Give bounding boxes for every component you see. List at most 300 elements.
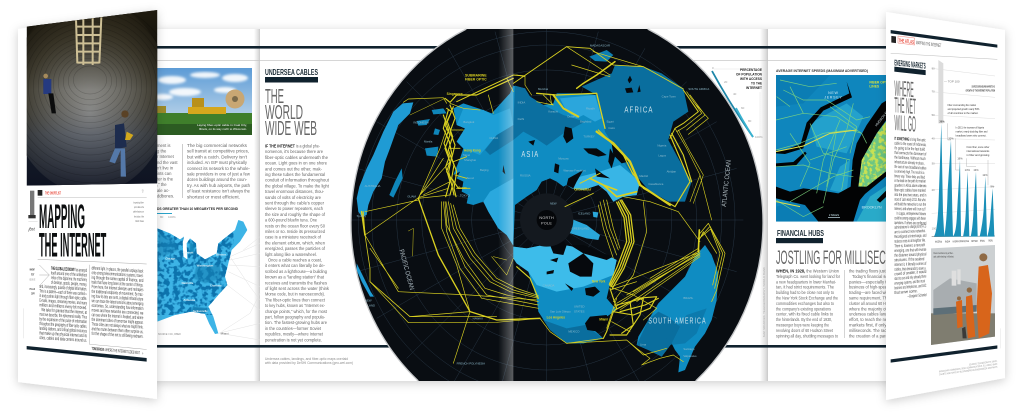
text block: emerging markets article: Reconfigured at interchange, and [894, 233, 927, 239]
text block: undersea cables article: known as a "landing station" that [265, 275, 325, 280]
chart: projected internet growth by market: 20% [948, 136, 954, 140]
legend: percentage of population with internet access: 60 [741, 106, 745, 110]
panel: left cover page: THE INTERNET [39, 226, 106, 264]
region: Andes shading [637, 312, 680, 357]
text block: undersea cables article: tion. The fastest-growing hubs are [265, 320, 328, 325]
text block: intro article second column: ing through the same capital of finance, and [92, 275, 144, 283]
panel: right page, emerging markets: Internet, and where will it run out? [894, 206, 926, 212]
place labels: San Luis Obispo [550, 310, 571, 314]
place labels: Egypt [607, 120, 614, 124]
chart annotations: and projected growth nearly 50% [948, 107, 980, 111]
text block: emerging markets article: into the past two years, and in [894, 192, 927, 198]
place labels: Nigeria [657, 144, 667, 148]
region: far east Russia [483, 178, 513, 246]
panel: right page, emerging markets: WHERE [894, 76, 914, 102]
cables: South Atlantic fan [612, 248, 700, 310]
chart: projected internet growth by market: 13% [965, 168, 971, 172]
text block: emerging markets article: In Lagos, entrepreneur Moses [897, 211, 926, 216]
chart annotations: international networks [967, 149, 990, 153]
land: Africa [582, 65, 692, 202]
text block: emerging markets article: are to connect new networks. [894, 228, 926, 234]
chart axis labels: KAZAKHSTAN [953, 239, 963, 243]
region: Canada [513, 246, 617, 292]
section tag: THE SHORTLIST [45, 191, 61, 197]
chart: projected internet growth by market: 70 [932, 90, 935, 94]
cables: Red Sea and Mediterranean [597, 132, 640, 185]
callout: submarine fiber optic: Los Angeles [547, 316, 565, 320]
place labels: INDIA [518, 100, 525, 104]
map: United States internet speeds: Boston [216, 253, 226, 257]
map: United States internet speeds: Miami [221, 331, 229, 335]
text block: undersea cables article: and comes out the other, mak- [265, 166, 323, 171]
text block: undersea cables article: it enters what can literally be de- [265, 263, 326, 268]
north pole marker [520, 193, 573, 247]
text block: fragment of first column: g the [157, 149, 167, 154]
running head: THE ATLAS [899, 38, 914, 46]
callout: submarine fiber optic: Singapore [447, 92, 463, 96]
ocean labels [397, 160, 733, 291]
text block: commercial networks column: included. An ISP must physically [187, 160, 248, 165]
chart: projected internet growth by market [932, 60, 995, 244]
sidebar labels: WHEN? [30, 268, 35, 272]
text block: financial hubs article: undersea cables land, with great [849, 312, 908, 317]
text block: financial hubs article: the company's existing operations [776, 306, 831, 311]
place labels: Baghdad [580, 119, 592, 123]
north pole marker: NORTH [539, 216, 554, 220]
photo caption: cable factory on [133, 210, 144, 214]
place labels: FRENCH POLYNESIA [457, 361, 485, 365]
title: the world wide web: WORLD [265, 102, 303, 124]
chart annotations: — TOP 100 [944, 79, 960, 83]
panel: left cover page: Pacific Ocean [135, 219, 144, 223]
chart axis labels: NIGERIA [935, 240, 942, 244]
chart: projected internet growth by market: 40 [932, 136, 935, 140]
text block: fragment of first column: n't live in [157, 165, 174, 170]
text block: financial hubs article: markets first, if only by a few [849, 322, 905, 328]
patches of lighter blue [776, 75, 863, 222]
panel: left cover page: throughout the geography of fiber-optic cables, [39, 321, 87, 329]
chart heading: US speeds [157, 207, 238, 219]
text block: undersea cables article: sleeve to power repeaters, each [265, 206, 324, 211]
text block: intro article second column: and the routes between them often surprise us, [92, 326, 143, 334]
map contents clipped to disc [352, 29, 744, 381]
photo: cable-laying tractor in a field: Laying fiber-optic cable in Coal City, [197, 123, 247, 127]
map: United States internet speeds: Detroit [184, 250, 193, 254]
chart: projected internet growth by market: 100 [932, 226, 937, 230]
text block: fragment of first column: ale ac- [157, 188, 170, 193]
region: China [457, 108, 513, 155]
text block: undersea cables article: ing these tubes the fundamental [265, 172, 325, 177]
worker left [43, 74, 56, 113]
sidebar labels: PULLS [30, 287, 35, 291]
text block: intro article [39, 265, 87, 343]
land: Greenland and Iceland [570, 212, 600, 240]
text block: intro article second column: From here, the Internet diverges and reshapes [92, 284, 144, 292]
panel: central fold-out spread [150, 29, 895, 381]
place labels: STATES [574, 309, 585, 313]
footnote: CHARTS AND MAPS BY BLOOMBERG BUSINESSWEEK GRAPHICS [939, 366, 998, 376]
place labels: Warsaw Frankfurt [563, 169, 586, 173]
text block: emerging markets article: the distance toward physical [894, 251, 926, 258]
text block: intro article: million and millions every bit moved. [39, 302, 87, 310]
panel: right page, emerging markets: MAPPING THE INTERNET [916, 40, 941, 49]
map: fiber-optic lines in New York and New Jersey [776, 75, 894, 222]
cables: East Asia cluster [443, 105, 470, 197]
section tag: ⇧ [141, 189, 145, 194]
callout: submarine fiber optic [447, 73, 608, 321]
text block: undersea cables article: travel enormous distances, thou- [265, 189, 325, 194]
neighbourhood labels: NEW [828, 91, 839, 95]
text block: financial hubs article: effort, to reach the new wave of [849, 317, 906, 322]
heading: average internet speeds: AVERAGE INTERNET SPEEDS (MAXIMUM ADVERTISED) [776, 69, 869, 73]
place labels: Cairo [608, 126, 616, 130]
place labels: MADAGASCAR [590, 44, 610, 48]
photo: crew in orange landing a cable: Crew members lay a fiber- [933, 251, 953, 255]
text block: undersea cables article: of light sent across the water (think [265, 286, 330, 291]
neighbourhood labels: BROOKLYN [862, 206, 882, 210]
text block: emerging markets article: binary way. These links are lifted [894, 173, 925, 180]
text block: financial hubs article: milliseconds. The race has led to [849, 328, 908, 333]
place labels: Casablanca [648, 182, 664, 186]
chart axis labels: INDIA [945, 239, 950, 243]
map: United States internet speeds: Atlanta [183, 298, 195, 302]
rivers [776, 82, 890, 222]
text block: emerging markets article: cables, that demands to save a [894, 265, 926, 272]
place labels: Sydney [357, 214, 367, 218]
text block: undersea cables article: nomenon, it's because there are [265, 149, 324, 154]
cables: Caribbean cluster [603, 288, 658, 338]
map: fiber-optic lines in New York and New Jersey: FIBER OPTIC [869, 80, 891, 84]
text block: emerging markets article: is extremely high. The result is a [894, 169, 925, 175]
neighbourhood labels: JERSEY [824, 96, 842, 100]
legend: percentage of population with internet access: 0 [712, 66, 714, 70]
chart annotations: broadband users who connect. [956, 134, 986, 138]
text block: financial hubs article [776, 268, 911, 338]
chart: projected internet growth by market: 20 [932, 188, 935, 192]
place labels: ZEALAND [362, 304, 375, 308]
text block: emerging markets article: will build the networks to run the [894, 201, 926, 207]
text block: undersea cables article: case is a miniature racetrack of [265, 235, 322, 240]
text block: intro article: by the expansion of the pulse of information [39, 316, 87, 324]
text block: undersea cables article: energized, passes the particles of [265, 246, 326, 251]
callout: submarine fiber optic: Hong Kong [464, 148, 481, 152]
panel: left cover page: optic cable at the [134, 205, 144, 209]
panel: right page, emerging markets: THE NET [894, 92, 916, 119]
place labels: GUAM [407, 194, 416, 198]
submarine cables [362, 47, 725, 365]
text block: emerging markets article: cable to the coast of Indonesia, [894, 141, 926, 147]
text block: intro article: landing stations, and critical global resources [39, 326, 87, 334]
text block: undersea cables article: ocean. Light goes in on one shore [265, 161, 328, 166]
text block: emerging markets article: that connects the dominant of [894, 150, 927, 157]
panel: right page, emerging markets [886, 12, 1005, 400]
legend: percentage of population with internet access: TO THE [751, 82, 763, 86]
place labels: Shanghai [464, 158, 476, 162]
place labels: Beijing [480, 168, 489, 172]
text block: fragment of first column: ints can [157, 171, 172, 176]
cables: Asia to Indian Ocean [403, 98, 447, 103]
text block: emerging markets article: most of Latin early 2013. But who [894, 197, 926, 202]
text block: commercial networks column: of least resistance isn't always the [187, 189, 251, 194]
ocean labels: ATLANTIC OCEAN [721, 160, 733, 207]
photo: crew in orange landing a cable: optic cable landing in Mumbai. [933, 254, 954, 258]
text block: intro article second column: trails that have long been at the center of things. [92, 280, 143, 288]
text block: financial hubs article: the trading floors just blocks away. [849, 268, 909, 274]
text block: financial hubs article: building had to be close not only to [776, 290, 835, 295]
legend: percentage of population with internet access: 80 [748, 119, 752, 123]
text block: undersea cables article: change points," which, for the most [265, 309, 328, 314]
land: Australia [357, 102, 413, 217]
callout: submarine fiber optic: New York [592, 279, 605, 283]
text block: intro article second column: the traditional endpoints of movement. By trac- [92, 289, 144, 297]
text block: undersea cables article: fiber-optic cables underneath the [265, 155, 329, 160]
text block: fragment of first column: nd the vast [157, 160, 178, 165]
callout: submarine fiber optic: FIBER OPTIC [465, 78, 487, 82]
chart axis labels: PERU [988, 239, 993, 243]
text block: undersea cables article: IF THE INTERNET is a global phe- [265, 144, 321, 148]
text block: undersea cables article: republics, mostly—where Internet [265, 332, 324, 337]
map: United States internet speeds: SOURCE: FCC, FIBER [158, 332, 181, 336]
land: North America [513, 246, 617, 344]
text block: undersea cables article: the global village. To make the light [265, 183, 330, 188]
text block: intro article second column: economies. So, understanding how information [92, 303, 144, 311]
fold shadow across map [498, 29, 513, 381]
text block: undersea cables article: part, follow geography and popula- [265, 314, 326, 320]
panel: left cover page: relics of the digital era: the machinery [51, 275, 87, 282]
text block: intro article: THE GLOBAL ECONOMY has arranged [51, 266, 87, 273]
footer teaser [90, 344, 147, 356]
text block: intro article second column: can see where the Internet is headed, and where [92, 312, 144, 320]
title: mapping the internet [39, 198, 106, 264]
place labels: CHINA [489, 136, 498, 140]
text block: intro article: and, increasingly, quanta of digital information. [39, 284, 87, 292]
text block: commercial networks column: but with a catch. Delivery isn't [187, 154, 248, 159]
text block: financial hubs article: WHEN, IN 1928, the Western Union [776, 268, 840, 274]
text block: commercial networks column: dozen buildings around the coun- [187, 177, 248, 182]
text block: emerging markets article: that serve some. [894, 288, 918, 295]
photo: cable-laying tractor in a field [153, 68, 252, 135]
place labels: Karachi [548, 109, 558, 113]
sidebar labels: COPY [31, 292, 35, 296]
text block: financial hubs article: cluster all around 60 Hudson, which is [849, 301, 911, 306]
title: the world wide web: WIDE WEB [265, 118, 317, 140]
chart heading: US speeds: 100% [168, 215, 176, 219]
place labels: NEW [365, 299, 372, 303]
title: the world wide web [265, 86, 317, 140]
region: Europe [572, 165, 640, 202]
place labels: TOKYO [460, 194, 471, 198]
thick rule [27, 346, 147, 362]
text block: financial hubs article: center, with its fixed cable links to [776, 312, 834, 317]
text block: emerging markets article [894, 136, 927, 300]
text block: fragment of first column: r Internet [157, 154, 175, 159]
text block: undersea cables article: conduit of information throughout [265, 178, 330, 183]
text block: emerging markets article: internet it, it literally comes of [894, 261, 927, 267]
place labels: Manila [424, 140, 433, 144]
continent labels [521, 105, 707, 325]
text block: fragment of first column [157, 143, 178, 198]
heading: financial hubs [776, 228, 824, 243]
big numeral: jbst [28, 226, 35, 231]
text block: intro article: that make up the physical internet and its [39, 330, 87, 338]
text block: undersea cables article [265, 144, 330, 342]
text block: emerging markets article: infrastructure already in place, [894, 159, 924, 166]
text block: undersea cables article: scribed as a lighthouse—a building [265, 269, 328, 274]
legend: percentage of population with internet access: 40 [733, 92, 737, 96]
text block: undersea cables article: Morse code, but in nanoseconds). [265, 292, 325, 297]
text block: intro article second column: different light. In places, the parallel unplugs back [92, 266, 144, 274]
text block: intro article: This is a pattern—each of them was carried— [39, 288, 87, 296]
section tag [38, 189, 147, 197]
text block: financial hubs article: revolving doors of 60 Hudson Street [776, 328, 834, 333]
legend: percentage of population with internet access: INTERNET [746, 86, 763, 90]
chart annotations: From fiber, some other [967, 145, 989, 149]
map: United States internet speeds: Chicago [165, 256, 175, 260]
world map: submarine fiber-optic cables centred on the North Pole [350, 28, 764, 382]
cables: Pacific coast of the Americas [517, 267, 538, 298]
place labels: TURKEY [583, 135, 595, 139]
panel: right page, emerging markets: EMERGING MARKETS [894, 57, 926, 71]
caption: map credit: with data provided by DeSHI Communications (geo-wel.com) [265, 361, 353, 365]
place labels: Cape Town [662, 95, 676, 99]
place labels: RUSSIA [520, 173, 531, 177]
bottom rule [891, 345, 997, 363]
text block: financial hubs article: panies—especially those in the [849, 279, 908, 284]
place labels: HAWAII [473, 317, 483, 321]
Brooklyn [857, 183, 890, 222]
map: United States internet speeds: Nashville [182, 281, 194, 285]
chart annotations [944, 79, 995, 185]
sidebar labels: ISSUE [29, 278, 35, 282]
text block: commercial networks column: try. As with hub airports, the path [187, 183, 251, 188]
neighbourhood labels: 2 MILES [829, 213, 839, 217]
text block: financial hubs article: Today's financial services com- [852, 274, 910, 279]
place labels: ICELAND [578, 212, 590, 216]
callout: submarine fiber optic: SUBMARINE [465, 73, 488, 77]
text block: intro article second column: we can trace the latest tensions about emerging [92, 298, 144, 306]
legend: percentage of population with internet access [712, 66, 763, 139]
text block: emerging markets article: start to use and rely already there [894, 273, 927, 281]
sidebar labels: TEXT [31, 272, 34, 276]
place labels: Riyadh [586, 106, 595, 110]
legend: percentage of population with internet access: OF POPULATION [736, 72, 762, 76]
text block: commercial networks column: The big commercial networks [187, 143, 247, 148]
photo: workers inside a cable-coil tank [3, 0, 177, 193]
cables: North Atlantic bundle [609, 200, 634, 288]
text block: undersea cables article: penetration is not yet complete. [265, 337, 322, 342]
regions: South and Central Asia shading [485, 86, 585, 155]
text block: emerging markets article: emerging systems, and the most [894, 278, 925, 286]
continent labels: AFRICA [624, 105, 654, 115]
place labels: Mumbai [538, 87, 548, 91]
text block: undersea cables article: in the countries—former Soviet [265, 326, 322, 331]
chart heading: US speeds: 80 [160, 215, 164, 219]
text block: intro article: in and pushes light through fiber-optic cable. [39, 293, 87, 301]
legend: percentage of population with internet access: 100% [755, 135, 763, 139]
chart: projected internet growth by market: 50 [932, 113, 935, 117]
photo: cable-laying tractor in a field: Illinois, on its way north to Wisconsin. [199, 127, 247, 131]
fiber-optic lines [776, 80, 870, 217]
chart: projected internet growth by market: 26% [939, 120, 945, 124]
chart: projected internet growth by market: 30 [932, 161, 935, 165]
chart: projected internet growth by market: 13% [973, 168, 979, 172]
panel: left cover page: MAPPING [39, 198, 85, 236]
big numeral [28, 191, 38, 231]
place labels: Valparaiso [683, 354, 697, 358]
place labels: INDONESIA [413, 120, 429, 124]
region: Arabia [560, 95, 602, 122]
neighbourhood labels [824, 91, 882, 218]
land: South America [637, 245, 718, 372]
heading: emerging markets [894, 57, 926, 75]
place labels: Santiago [683, 347, 695, 351]
place labels: GREENLAND [572, 226, 589, 230]
text block: undersea cables article: sent through the cable's copper [265, 200, 325, 206]
place labels: Delhi [518, 117, 524, 121]
panel: right page, emerging markets: business and telephones, and ASC [894, 283, 926, 290]
text block: fragment of first column: ment is [157, 143, 170, 148]
chart: projected internet growth by market: 12% [982, 173, 988, 177]
chart axis labels: RUSSIA [963, 239, 969, 243]
place labels: CANADA [543, 284, 555, 288]
text block: financial hubs article: same requirement. They, too, must [849, 296, 910, 300]
chart annotations: In 2013, the increase of Nigeria [956, 126, 984, 130]
text block: emerging markets article: reduces costs to all neighbor like. [894, 237, 926, 244]
text block: undersea cables article: miles or so. Inside its pressurized [265, 229, 326, 234]
text block: financial hubs article: where the majority of the world's [849, 306, 907, 311]
text block: emerging markets article: emerging, one that will reverse [894, 247, 927, 253]
chart: projected internet growth by market: 16% [957, 156, 963, 160]
caption: map credit: Undersea cables, landings, and fiber-optic maps overlaid [265, 357, 348, 361]
heading: undersea cables: UNDERSEA CABLES [265, 67, 318, 77]
text block: commercial networks column [182, 143, 251, 199]
text block: intro article second column: onto strong telecommunications systems, travel- [92, 270, 144, 278]
panel: right page, emerging markets: growther. In Africa alone undersea [894, 183, 927, 188]
land: Eurasia [453, 86, 640, 246]
text block: intro article second column: for the shape of the net is still being redrawn. [92, 331, 143, 339]
map: fiber-optic lines in New York and New Jersey: HUDSON RIVER [874, 104, 894, 127]
caption: vertical photo credit: MAP SOURCES: TELEGEOGRAPHY, WORLD BANK [762, 267, 766, 337]
legend: percentage of population with internet access: PERCENTAGE [740, 68, 763, 72]
seas: Mediterranean, Caspian and others [503, 76, 641, 188]
text block: intro article: itself around one of the unlikeliest [51, 270, 87, 278]
panel: left cover page: the docks of the [134, 214, 144, 218]
text block: commercial networks column: sell transit at competitive prices, [187, 149, 249, 154]
panel: right page, emerging markets: administrators to charge point (FCC [894, 223, 926, 230]
title: the world wide web: THE [265, 86, 284, 108]
chart heading: US speeds: DS GREATER THAN 10 MEGABYTES PER SECOND [157, 207, 238, 211]
text block: financial hubs article: the hinterlands. By the end of 1930, [776, 317, 832, 322]
text block: undersea cables article: the element erbium, which, when [265, 240, 326, 245]
sidebar labels [29, 268, 35, 296]
panel: right page, emerging markets: WILL GO [894, 110, 916, 137]
text block: emerging markets article: structures. If the seabed [894, 256, 925, 262]
place labels: Madrid [639, 174, 648, 178]
text block: financial hubs article: spinning all day, shuttling messages to [776, 333, 839, 338]
text block: emerging markets article: IT SOMETHING is bring fiber-optic [894, 136, 926, 142]
footer teaser: › [142, 350, 144, 356]
legend: percentage of population with internet access: WITH ACCESS [740, 77, 763, 81]
place labels: MEXICO [568, 330, 580, 334]
place labels: Bangkok [463, 120, 475, 124]
text block: financial hubs article: a new headquarters in lower Manhat- [776, 279, 837, 284]
text block: undersea cables article: light along like a waterwheel. [265, 252, 317, 257]
panel: right page, emerging markets: could be among engages with these [894, 215, 926, 221]
text block: intro article second column: Those cities are not always what we might think, [92, 322, 143, 330]
chart axis labels: VIETNAM [971, 239, 978, 243]
text block: emerging markets article: the landmass. Without much [894, 155, 926, 161]
text block: financial hubs article: tan, it had strict requirements. The [776, 285, 835, 290]
